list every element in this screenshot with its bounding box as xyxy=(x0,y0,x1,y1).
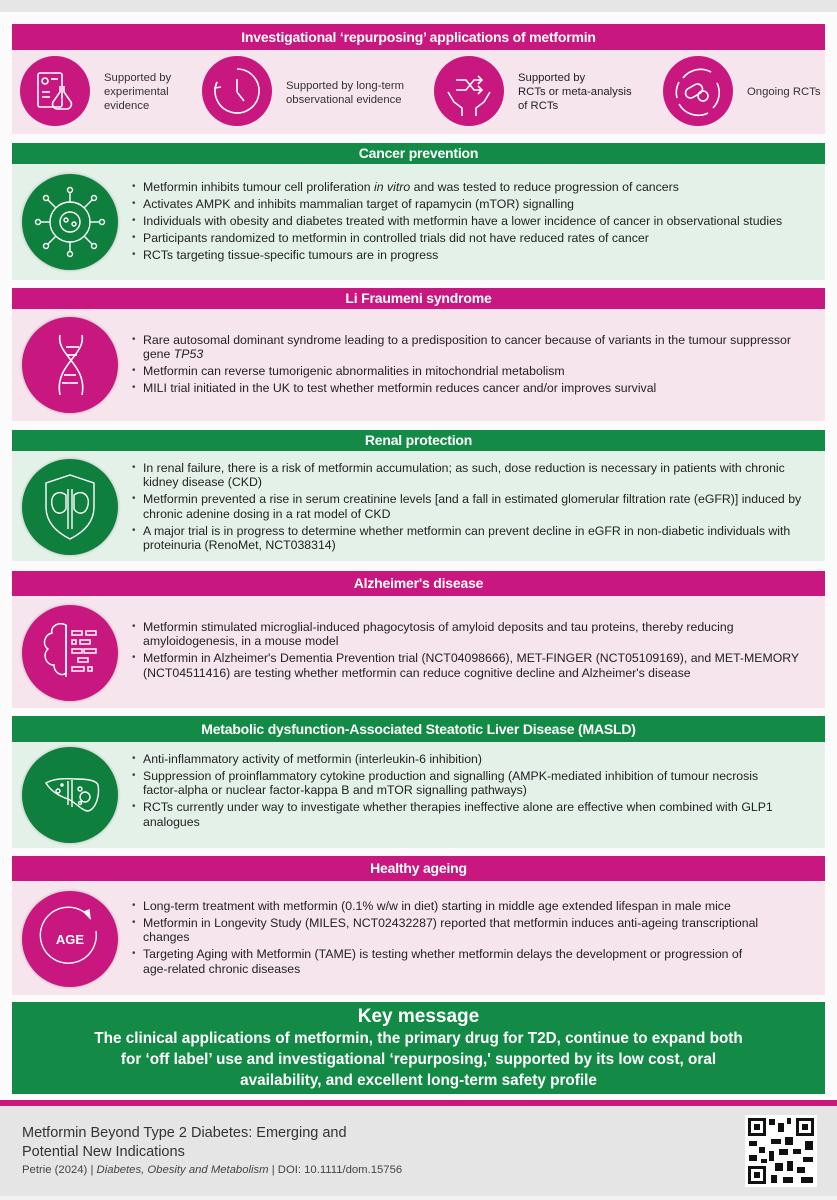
key message: availability, and excellent long-term safety profile xyxy=(240,1072,597,1089)
footer title: Metformin Beyond Type 2 Diabetes: Emerging and xyxy=(22,1125,347,1141)
header: healthy ageing: Healthy ageing xyxy=(370,860,467,876)
header: repurposing xyxy=(12,24,825,50)
footer title xyxy=(22,1125,347,1160)
legend text 2: observational evidence xyxy=(286,94,402,106)
panel: Li Fraumeni xyxy=(12,309,825,421)
bullets: MASLD xyxy=(132,752,773,829)
bullets: healthy ageing: Metformin in Longevity Study (MILES, NCT02432287) reported that metformin induces anti-ageing transcriptional xyxy=(143,916,758,930)
QR code xyxy=(745,1115,817,1187)
icon: kidney shield xyxy=(22,459,118,555)
icon: DNA xyxy=(22,317,118,413)
bullets: cancer: Individuals with obesity and diabetes treated with metformin have a lower incidence of cancer in observational studies xyxy=(143,214,782,228)
panel: renal xyxy=(12,451,825,561)
header: Li Fraumeni xyxy=(12,288,825,309)
bullets: cancer xyxy=(132,180,782,262)
icon: ongoing xyxy=(663,56,733,126)
legend text 1: experimental xyxy=(104,86,169,98)
bullets: Alzheimer xyxy=(132,620,799,680)
bullets: cancer: Activates AMPK and inhibits mammalian target of rapamycin (mTOR) signalling xyxy=(143,197,574,211)
bullets: Li Fraumeni: Rare autosomal dominant syndrome leading to a predisposition to cancer because of variants in the tumour suppressor xyxy=(143,333,791,347)
header: cancer prevention: Cancer prevention xyxy=(359,145,478,161)
bullets: cancer: Metformin inhibits tumour cell proliferation in vitro and was tested to reduce progression of cancers xyxy=(143,180,679,194)
bullets: Li Fraumeni: Metformin can reverse tumorigenic abnormalities in mitochondrial metabolism xyxy=(143,364,565,378)
header: MASLD xyxy=(12,716,825,742)
panel: cancer xyxy=(12,164,825,280)
icon: AGE xyxy=(22,891,118,987)
bullets: Li Fraumeni: gene TP53 xyxy=(143,347,203,361)
bullets: renal: proteinuria (RenoMet, NCT038314) xyxy=(143,538,336,552)
legend text 3: of RCTs xyxy=(518,100,558,112)
bullets: renal: Metformin prevented a rise in serum creatinine levels [and a fall in estimated glomerular filtration rate (eGFR)] induced by xyxy=(143,492,801,506)
panel: MASLD xyxy=(12,742,825,848)
header: Alzheimer: Alzheimer's disease xyxy=(354,575,483,591)
header: renal: Renal protection xyxy=(365,432,472,448)
bullets: renal xyxy=(132,461,802,552)
bullets: renal: chronic adenine dosing in a rat model of CKD xyxy=(143,507,390,521)
bullets: Alzheimer: Metformin in Alzheimer's Dementia Prevention trial (NCT04098666), MET-FINGER (NCT05109169), and MET-MEMORY xyxy=(143,651,799,665)
key message: for ‘off label’ use and investigational ‘repurposing,' supported by its low cost, oral xyxy=(121,1051,716,1068)
legend text 2: Supported by long-term xyxy=(286,80,404,92)
divider line xyxy=(0,1100,837,1106)
icon: clock xyxy=(202,56,272,126)
bullets: MASLD: Anti-inflammatory activity of metformin (interleukin-6 inhibition) xyxy=(143,752,482,766)
icon: AGE: AGE xyxy=(56,932,84,947)
legend text 3 xyxy=(518,72,632,112)
legend text 4: Ongoing RCTs xyxy=(747,86,820,98)
bullets: MASLD: Suppression of proinflammatory cytokine production and signalling (AMPK-mediated inhibition of tumour necrosis xyxy=(143,769,758,783)
icon: hands xyxy=(434,56,504,126)
bullets: renal: kidney disease (CKD) xyxy=(143,475,262,489)
bullets: Alzheimer: (NCT04511416) are testing whether metformin can reduce cognitive decline and Alzheimer's disease xyxy=(143,666,691,680)
bullets: renal: A major trial is in progress to determine whether metformin can prevent decline in eGFR in non-diabetic individuals with xyxy=(143,524,790,538)
key message xyxy=(12,1002,825,1094)
footer title: Potential New Indications xyxy=(22,1144,185,1160)
icon: liver xyxy=(22,747,118,843)
panel: legend xyxy=(12,50,825,134)
header: cancer prevention xyxy=(12,143,825,164)
bullets: cancer: Participants randomized to metformin in controlled trials did not have reduced rates of cancer xyxy=(143,231,649,245)
panel: healthy ageing xyxy=(12,881,825,995)
header: renal xyxy=(12,430,825,451)
legend text 3: RCTs or meta-analysis xyxy=(518,86,632,98)
bullets: MASLD: RCTs currently under way to investigate whether therapies ineffective alone are effective when combined with GLP1 xyxy=(143,800,773,814)
bullets: healthy ageing: age-related chronic diseases xyxy=(143,962,300,976)
legend text 1: Supported by xyxy=(104,72,171,84)
key message: The clinical applications of metformin, the primary drug for T2D, continue to expand both xyxy=(94,1030,743,1047)
icon: experimental xyxy=(20,56,90,126)
header: healthy ageing xyxy=(12,856,825,881)
legend text 3: Supported by xyxy=(518,72,585,84)
bullets: healthy ageing: changes xyxy=(143,930,190,944)
bullets: Li Fraumeni: MILI trial initiated in the UK to test whether metformin reduces cancer and/or improves survival xyxy=(143,381,656,395)
bullets: Alzheimer: Metformin stimulated microglial-induced phagocytosis of amyloid deposits and tau proteins, thereby reducing xyxy=(143,620,734,634)
bottom strip xyxy=(0,1196,837,1200)
bullets: healthy ageing: Long-term treatment with metformin (0.1% w/w in diet) starting in middle age extended lifespan in male mice xyxy=(143,899,731,913)
top strip xyxy=(0,0,837,12)
bullets: Alzheimer: amyloidogenesis, in a mouse model xyxy=(143,634,338,648)
bullets: renal: In renal failure, there is a risk of metformin accumulation; as such, dose reduction is necessary in patients with chronic xyxy=(143,461,785,475)
icon: brain xyxy=(22,605,118,701)
header: Li Fraumeni: Li Fraumeni syndrome xyxy=(345,290,492,306)
legend text 2 xyxy=(286,80,404,106)
bullets: healthy ageing: Targeting Aging with Metformin (TAME) is testing whether metformin delays the development or progression of xyxy=(143,947,742,961)
header: MASLD: Metabolic dysfunction-Associated Steatotic Liver Disease (MASLD) xyxy=(201,721,636,737)
panel: Alzheimer xyxy=(12,596,825,708)
citation: Petrie (2024) | Diabetes, Obesity and Metabolism | DOI: 10.1111/dom.15756 xyxy=(22,1164,402,1176)
legend text 1 xyxy=(104,72,172,112)
bullets: MASLD: analogues xyxy=(143,815,200,829)
footer xyxy=(0,1106,837,1200)
bullets: Li Fraumeni xyxy=(132,333,791,395)
key message: Key message xyxy=(358,1006,479,1027)
header: repurposing: Investigational ‘repurposing’ applications of metformin xyxy=(241,29,596,45)
bullets: healthy ageing xyxy=(132,899,758,976)
icon: cancer cell xyxy=(22,174,118,270)
bullets: MASLD: factor-alpha or nuclear factor-kappa B and mTOR signalling pathways) xyxy=(143,783,527,797)
bullets: cancer: RCTs targeting tissue-specific tumours are in progress xyxy=(143,248,438,262)
legend text 1: evidence xyxy=(104,100,149,112)
header: Alzheimer xyxy=(12,571,825,596)
